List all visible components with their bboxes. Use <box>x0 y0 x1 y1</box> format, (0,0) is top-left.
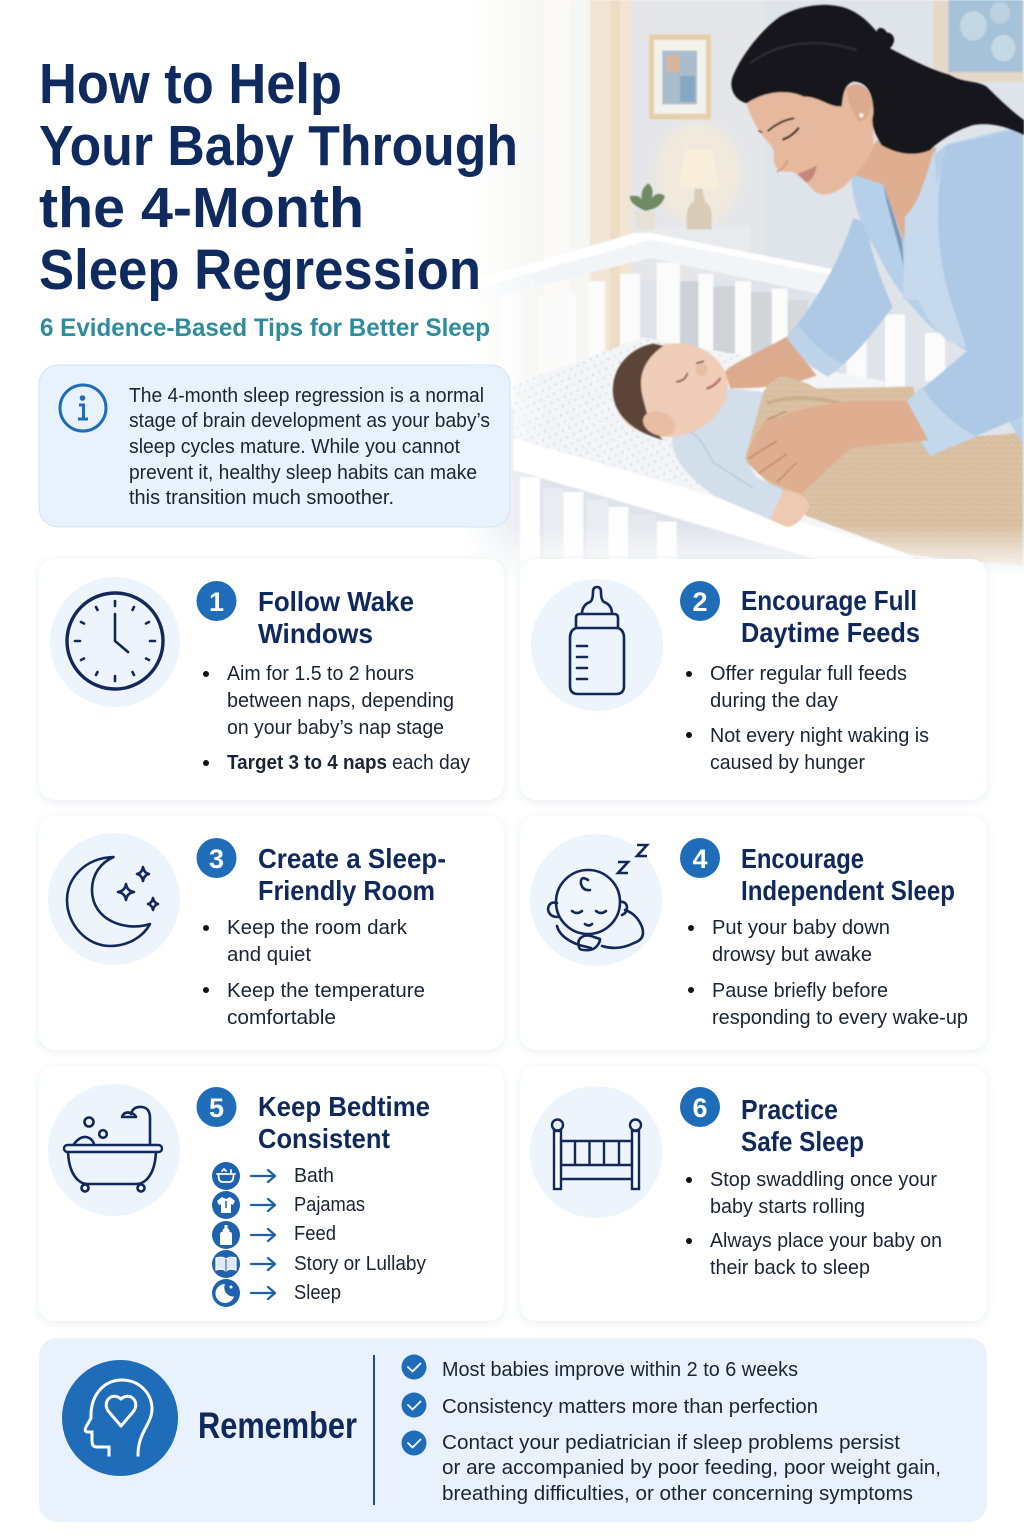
icon: moon and stars <box>48 833 180 965</box>
routine step: pajamas: Pajamas <box>294 1194 365 1216</box>
bullets: tip 2: during the day <box>710 690 838 712</box>
bullets: tip 6: their back to sleep <box>710 1257 870 1279</box>
divider <box>373 1355 375 1505</box>
bullets: tip 1: between naps, depending <box>227 690 454 712</box>
panel: tip 3 sleep-friendly room <box>39 816 504 1050</box>
bullets: tip 4: Pause briefly before <box>712 980 888 1002</box>
badge: 5 <box>196 1087 236 1127</box>
panel: tip 6 safe sleep <box>520 1066 987 1321</box>
checklist: Most babies improve within 2 to 6 weeks <box>442 1359 798 1381</box>
bullets: tip 3: Keep the temperature <box>227 980 425 1002</box>
panel: tip 1 follow wake windows <box>39 559 504 800</box>
intro text <box>129 385 490 509</box>
badge: 3 <box>196 838 236 878</box>
icon: information <box>60 385 106 431</box>
bullets: tip 2: Offer regular full feeds <box>710 663 907 685</box>
routine step: sleep <box>212 1279 341 1307</box>
bullets: tip 1: each day <box>392 752 470 774</box>
badge: 1 <box>196 581 236 621</box>
checklist: breathing difficulties, or other concerning symptoms <box>442 1483 913 1505</box>
title: the 4-Month <box>39 176 364 240</box>
intro text: this transition much smoother. <box>129 487 394 509</box>
bullets: tip 4: responding to every wake-up <box>712 1007 968 1029</box>
heading: tip 6 <box>741 1094 864 1157</box>
badge: 3: 3 <box>209 844 224 874</box>
title: Your Baby Through <box>39 114 518 178</box>
bullets: tip 1: on your baby’s nap stage <box>227 717 444 739</box>
badge: 1: 1 <box>209 587 224 617</box>
heading: tip 3 <box>258 843 446 906</box>
panel: tip 2 encourage full daytime feeds <box>520 559 987 800</box>
heading: remember: Remember <box>198 1405 357 1446</box>
heading: tip 5: Consistent <box>258 1123 390 1154</box>
heading: tip 3: Friendly Room <box>258 875 435 906</box>
heading: tip 3: Create a Sleep- <box>258 843 446 874</box>
subtitle: 6 Evidence-Based Tips for Better Sleep <box>40 314 490 342</box>
heading: tip 1: Follow Wake <box>258 586 414 617</box>
icon: baby bottle <box>531 579 663 711</box>
icon: head with heart <box>62 1360 178 1476</box>
heading: tip 5 <box>258 1091 430 1154</box>
checklist: Contact your pediatrician if sleep problems persist <box>442 1432 900 1454</box>
intro text: prevent it, healthy sleep habits can make <box>129 462 477 484</box>
mother's head (detail) <box>731 5 1024 300</box>
badge: 2 <box>680 581 720 621</box>
routine step: feed <box>212 1221 336 1249</box>
heading: tip 1 <box>258 586 414 649</box>
bullets: tip 4: drowsy but awake <box>712 944 872 966</box>
checklist <box>402 1354 941 1505</box>
intro text: sleep cycles mature. While you cannot <box>129 436 460 458</box>
bullets: tip 4: Put your baby down <box>712 917 890 939</box>
heading: tip 4: Encourage <box>741 843 864 874</box>
routine step: story or lullaby: Story or Lullaby <box>294 1253 426 1275</box>
checklist: Consistency matters more than perfection <box>442 1396 818 1418</box>
bullets: tip 3 <box>203 917 425 1029</box>
badge: 6: 6 <box>692 1093 708 1123</box>
bullets: tip 2: Not every night waking is <box>710 725 929 747</box>
bullets: tip 2: caused by hunger <box>710 752 865 774</box>
bullets: tip 6: Stop swaddling once your <box>710 1169 937 1191</box>
bullets: tip 6: baby starts rolling <box>710 1196 865 1218</box>
panel: tip 5 consistent bedtime <box>39 1066 504 1321</box>
panel: tip 4 independent sleep <box>520 816 987 1050</box>
routine step: feed: Feed <box>294 1223 336 1245</box>
intro text: The 4-month sleep regression is a normal <box>129 385 484 407</box>
panel: remember <box>39 1338 987 1522</box>
routine step: bath <box>212 1162 334 1190</box>
title: Sleep Regression <box>39 238 481 302</box>
heading: tip 4: Independent Sleep <box>741 875 955 906</box>
bullets: tip 1: Aim for 1.5 to 2 hours <box>227 663 414 685</box>
icon: bathtub <box>48 1084 180 1216</box>
bullets: tip 1 <box>203 663 470 774</box>
badge: 6 <box>680 1087 720 1127</box>
nursery photo: mother settling sleeping baby in crib <box>487 0 1024 566</box>
panel: intro information box <box>39 365 510 527</box>
icon: clock <box>50 577 180 707</box>
title: How to Help <box>39 52 342 116</box>
heading: tip 4 <box>741 843 955 906</box>
badge: 2: 2 <box>692 587 708 617</box>
bullets: tip 3: and quiet <box>227 944 311 966</box>
badge: 4: 4 <box>692 844 708 874</box>
badge: 5: 5 <box>209 1093 224 1123</box>
routine step: story or lullaby <box>212 1250 426 1278</box>
heading: tip 2: Encourage Full <box>741 585 917 616</box>
checklist: or are accompanied by poor feeding, poor weight gain, <box>442 1457 941 1479</box>
bullets: tip 3: Keep the room dark <box>227 917 408 939</box>
intro text: stage of brain development as your baby’s <box>129 410 490 432</box>
heading: tip 1: Windows <box>258 618 373 649</box>
heading: tip 2: Daytime Feeds <box>741 617 920 648</box>
routine step: bath: Bath <box>294 1165 334 1187</box>
bullets: tip 1: Target 3 to 4 naps <box>227 752 387 774</box>
routine step: pajamas <box>212 1191 365 1219</box>
bullets: tip 6: Always place your baby on <box>710 1230 942 1252</box>
heading: tip 5: Keep Bedtime <box>258 1091 430 1122</box>
bullets: tip 6 <box>686 1169 942 1279</box>
bullets: tip 4 <box>688 917 968 1029</box>
badge: 4 <box>680 838 720 878</box>
heading: tip 6: Safe Sleep <box>741 1126 864 1157</box>
heading: tip 6: Practice <box>741 1094 838 1125</box>
icon: sleeping baby <box>530 834 662 966</box>
icon: crib <box>530 1086 662 1218</box>
bullets: tip 2 <box>686 663 929 774</box>
title <box>39 52 518 302</box>
routine step: sleep: Sleep <box>294 1282 341 1304</box>
bullets: tip 3: comfortable <box>227 1007 336 1029</box>
heading: tip 2 <box>741 585 920 648</box>
